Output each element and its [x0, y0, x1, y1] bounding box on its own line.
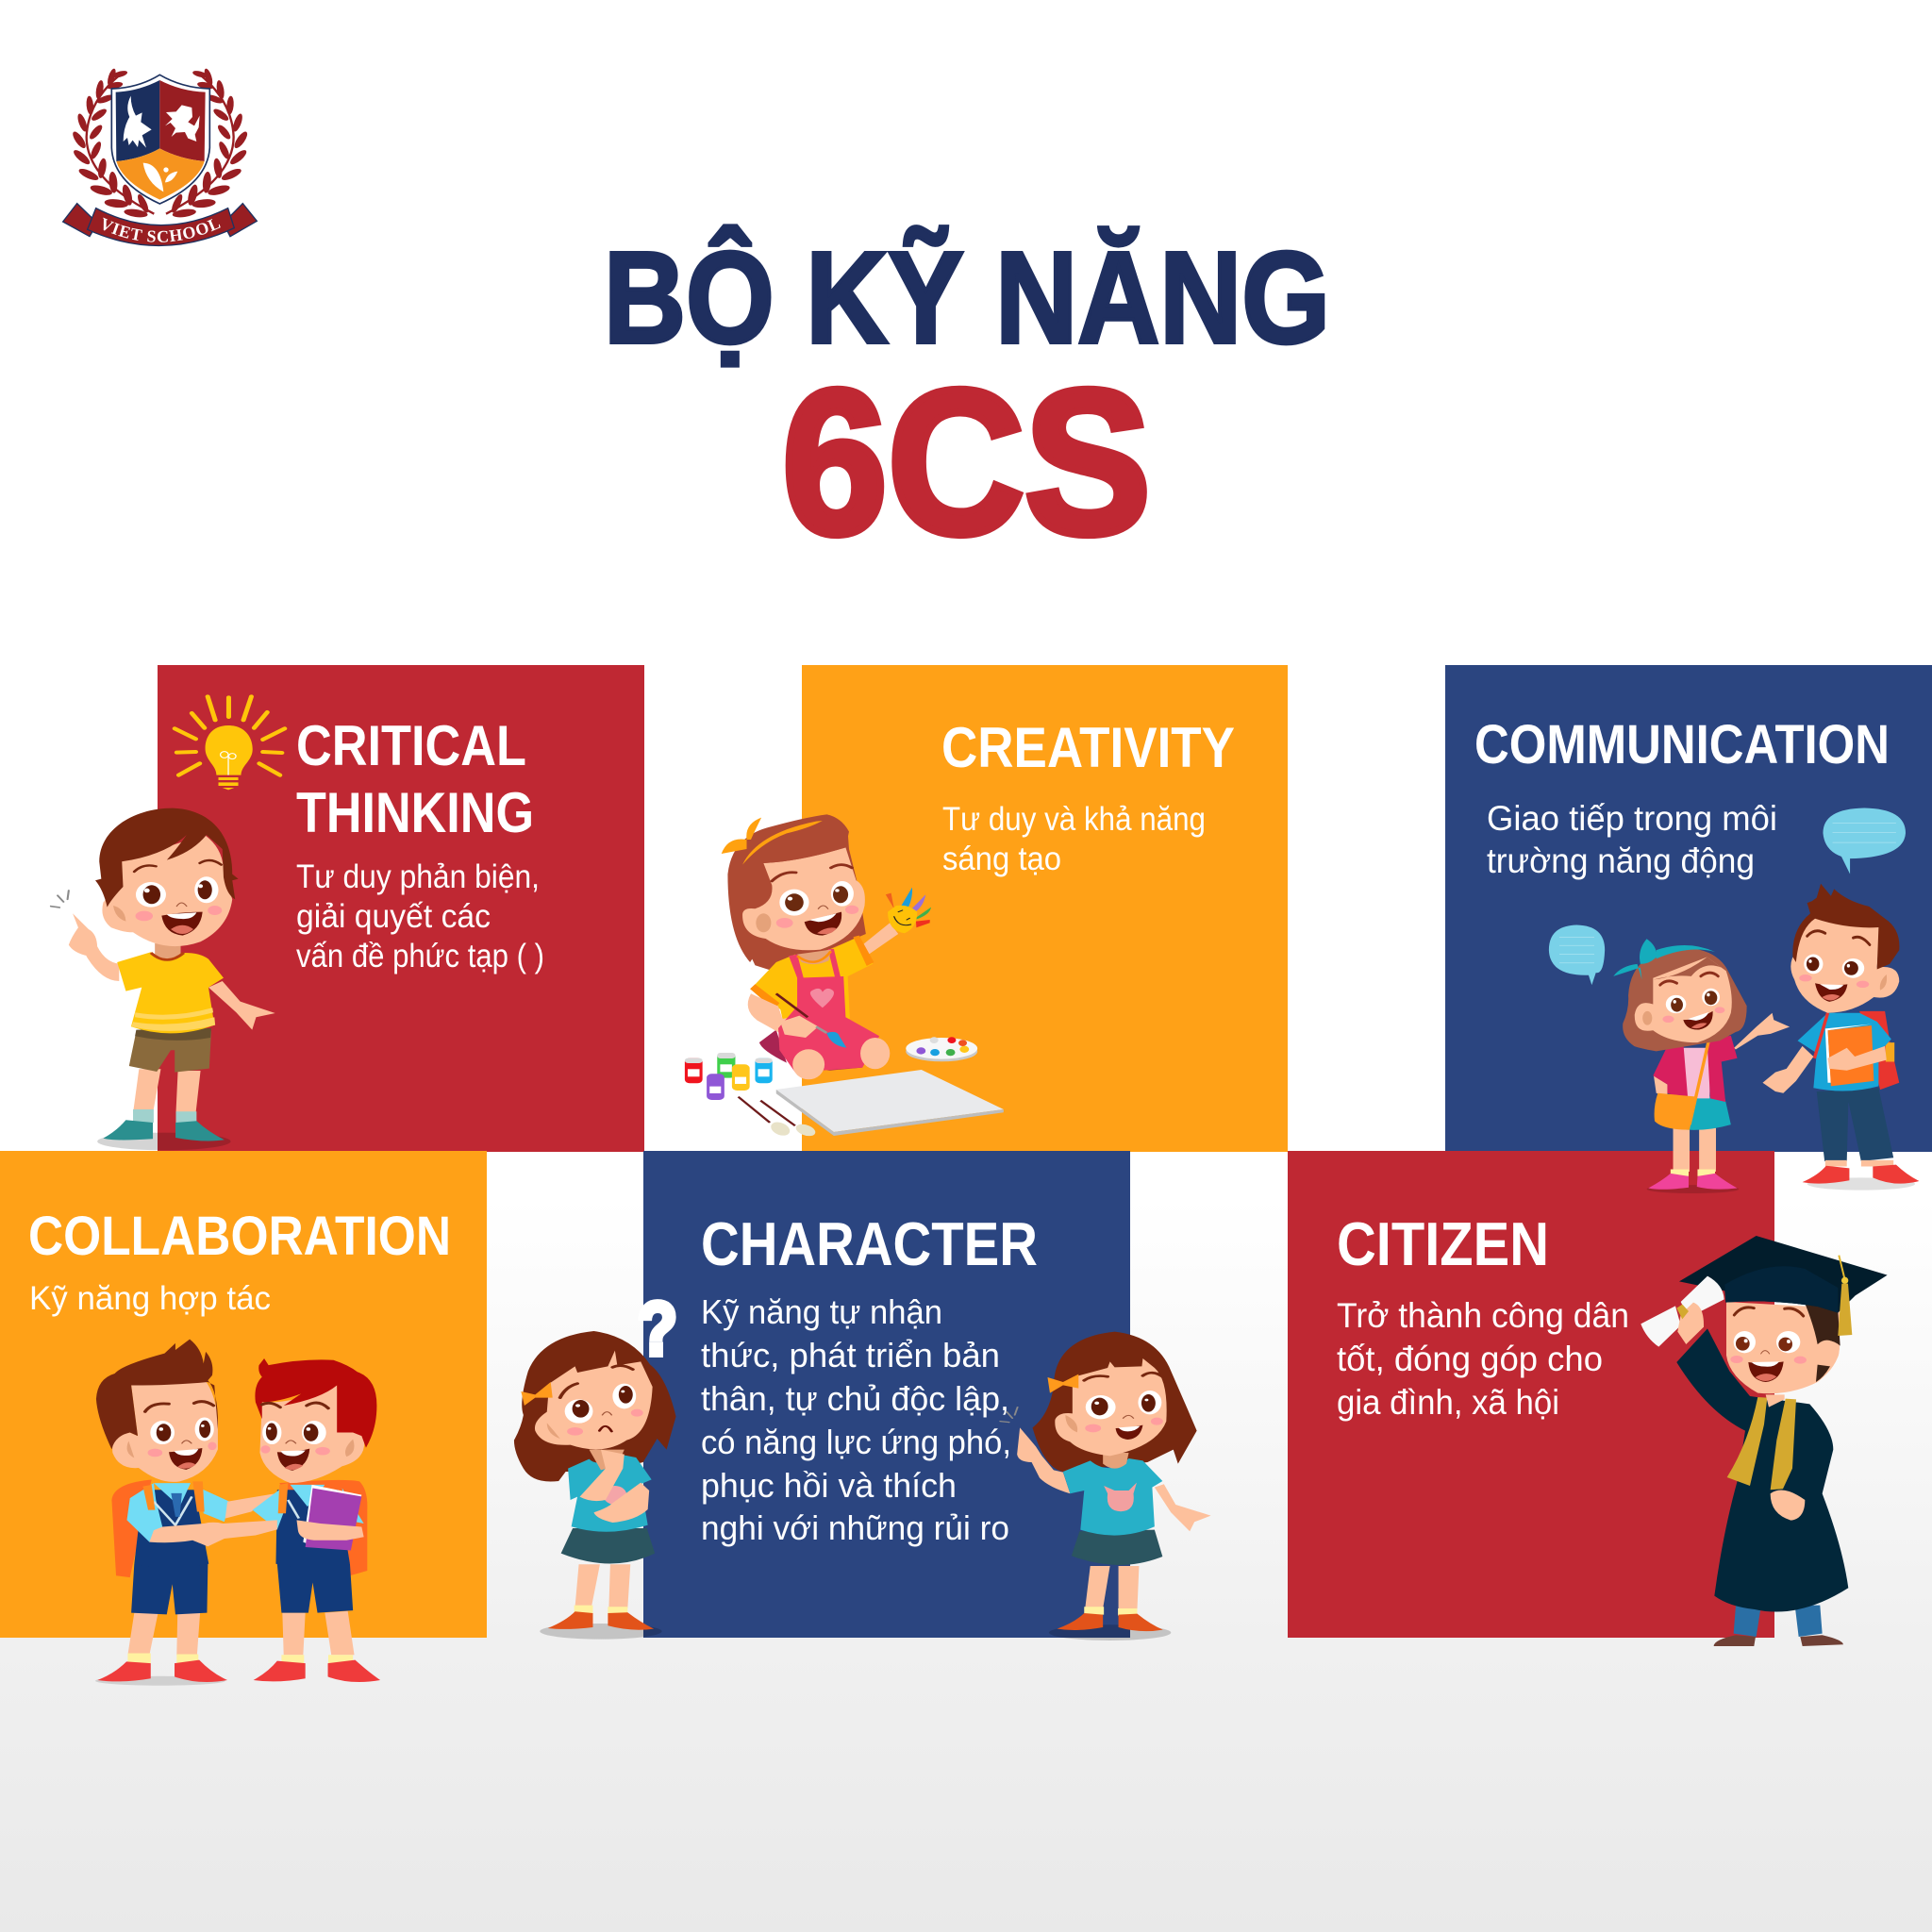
text: critical thinking description: vấn đề phức tạp ( ): [296, 938, 544, 974]
text: collaboration description: Kỹ năng hợp tác: [29, 1280, 271, 1317]
heading: citizen: CITIZEN: [1337, 1209, 1549, 1278]
character: graduate with diploma: [1641, 1236, 1888, 1646]
icon: speech bubble small: [1549, 924, 1605, 985]
boy with red hair: [192, 1358, 380, 1682]
panel: creativity: [802, 665, 1288, 1152]
shield: [111, 75, 209, 204]
character: girl painting with paints, palette and canvas: [685, 814, 1004, 1139]
mortarboard cap: [1679, 1236, 1888, 1336]
icon: question mark: ?: [638, 1287, 677, 1371]
canvas: [776, 1070, 1004, 1132]
text: creativity description: Tư duy và khả năng: [942, 801, 1206, 838]
text: character description: có năng lực ứng phó,: [701, 1423, 1011, 1461]
text: citizen description: gia đình, xã hội: [1337, 1383, 1559, 1422]
logo: Viet School crest: [62, 68, 258, 247]
boy with brown hair: [96, 1340, 277, 1682]
panel: critical thinking: [158, 665, 644, 1152]
character: boy with orange book: [1762, 884, 1919, 1191]
text: citizen description: Trở thành công dân: [1337, 1296, 1629, 1335]
heading: critical thinking: THINKING: [296, 781, 534, 844]
heading: critical thinking: [296, 714, 534, 844]
panel: collaboration: [0, 1151, 487, 1638]
ribbon text: VIET SCHOOL: [103, 217, 221, 242]
text: critical thinking description: [296, 858, 544, 974]
heading: character: CHARACTER: [701, 1209, 1038, 1278]
painted hand: [886, 888, 931, 933]
heading: creativity: CREATIVITY: [941, 716, 1235, 779]
panel: character: [643, 1151, 1130, 1638]
character: two boys shaking hands: [95, 1340, 380, 1686]
heading: collaboration: COLLABORATION: [28, 1206, 451, 1267]
title line: BỘ KỸ NĂNG: BỘ KỸ NĂNG: [604, 225, 1330, 371]
text: citizen description: [1337, 1296, 1629, 1422]
text: communication description: Giao tiếp trong môi: [1487, 799, 1777, 838]
text: communication description: trường năng động: [1487, 841, 1755, 880]
character: girl with orange bag: [1613, 939, 1790, 1193]
paint jars: [685, 1053, 773, 1100]
text: critical thinking description: giải quyết các: [296, 898, 491, 935]
text: character description: thức, phát triển bản: [701, 1336, 1000, 1374]
title line: 6CS: 6CS: [782, 348, 1151, 577]
heading: critical thinking: CRITICAL: [296, 714, 526, 777]
character: girl pointing: [1000, 1332, 1211, 1641]
diploma: [1641, 1276, 1724, 1347]
text: critical thinking description: Tư duy phản biện,: [296, 858, 540, 895]
text: citizen description: tốt, đóng góp cho: [1337, 1340, 1603, 1378]
text: character description: [701, 1292, 1011, 1547]
text: creativity description: sáng tạo: [942, 841, 1061, 877]
text: character description: nghi với những rủi ro: [701, 1508, 1009, 1547]
character: boy in yellow shirt pointing: [51, 808, 275, 1150]
text: communication description: [1487, 799, 1777, 880]
spare brushes: [739, 1097, 818, 1139]
text: character description: Kỹ năng tự nhận: [701, 1292, 942, 1331]
text: character description: thân, tự chủ độc lập,: [701, 1379, 1009, 1418]
palette: [906, 1037, 977, 1061]
character: thinking girl: [514, 1331, 676, 1640]
panel: communication: [1445, 665, 1932, 1152]
laurel wreath: [71, 68, 250, 219]
panel: citizen: [1288, 1151, 1774, 1638]
ribbon: [62, 202, 258, 247]
icon: light bulb: [175, 696, 285, 790]
icon: speech bubble large: [1823, 808, 1906, 874]
text: creativity description: [942, 801, 1206, 877]
text: character description: phục hồi và thích: [701, 1466, 957, 1505]
